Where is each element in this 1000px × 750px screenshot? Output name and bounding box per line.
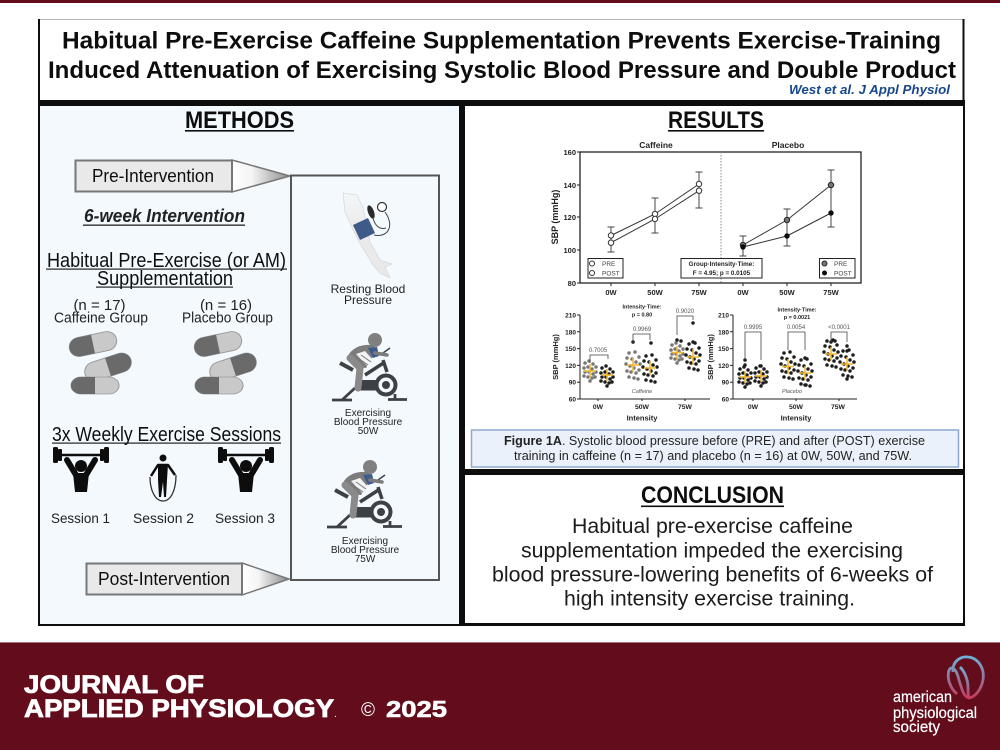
placebo group label: Placebo Group <box>182 310 273 326</box>
copyright <box>334 696 447 722</box>
dot plot: caffeine <box>551 304 710 422</box>
panel: methods <box>40 106 459 624</box>
dot plot: placebo: 210 <box>718 312 729 320</box>
dot plot: caffeine: 0W <box>593 404 604 411</box>
figure caption: training in caffeine (n = 17) and placebo (n = 16) at 0W, 50W, and 75W. <box>514 448 912 463</box>
title text: Habitual Pre-Exercise Caffeine Supplementation Prevents Exercise-Training <box>62 28 941 54</box>
label: exercising blood pressure 75W: 75W <box>355 554 376 565</box>
icon: cyclist 75W <box>327 460 402 527</box>
label: exercising blood pressure 75W: Exercising <box>342 536 388 547</box>
line chart: SBP pre and post: 75W <box>691 288 708 297</box>
dot plot: caffeine: Intensity·Time: <box>622 304 662 310</box>
dot plot: caffeine: p = 0.80 <box>632 312 652 318</box>
journal name: APPLIED PHYSIOLOGY <box>24 695 334 723</box>
supplementation heading: Habitual Pre-Exercise (or AM) <box>47 250 286 272</box>
icon: weightlifter session 3 <box>218 447 274 492</box>
dot plot: placebo <box>706 308 857 422</box>
dot plot: caffeine: 0.9020 <box>676 309 695 315</box>
line chart: SBP pre and post: 75W <box>823 288 840 297</box>
exercise sessions heading: 3x Weekly Exercise Sessions <box>52 424 281 446</box>
icon: jump rope session 2 <box>150 454 176 501</box>
arrow: post-intervention: Post-Intervention <box>98 569 230 589</box>
dot plot: placebo: 0.9995 <box>744 325 763 331</box>
conclusion text: Habitual pre-exercise caffeine <box>572 515 853 538</box>
label: exercising blood pressure 50W: 50W <box>358 426 379 437</box>
legend: caffeine: PRE <box>602 261 616 268</box>
label: exercising blood pressure 50W: Exercising <box>345 408 391 419</box>
dot plot: caffeine: 210 <box>565 312 576 320</box>
conclusion heading: CONCLUSION <box>641 482 784 509</box>
dot plot: placebo: Placebo <box>782 389 802 395</box>
6-week intervention heading: 6-week Intervention <box>84 206 245 226</box>
icon: cyclist 50W <box>332 333 407 400</box>
dot plot: caffeine: Caffeine <box>632 389 652 395</box>
copyright: © <box>361 700 375 721</box>
dot plot: caffeine: 180 <box>565 329 576 336</box>
label: resting blood pressure: Pressure <box>344 293 392 307</box>
logo: american physiological society <box>893 657 983 736</box>
line chart: SBP pre and post: 0W <box>605 288 618 297</box>
line chart: SBP pre and post: 140 <box>563 181 576 190</box>
dot plot: caffeine: 0.9969 <box>633 327 652 333</box>
dot plot: placebo: 75W <box>831 404 846 411</box>
citation: West et al. J Appl Physiol <box>789 83 951 97</box>
dot plot: placebo: Intensity·Time: <box>777 308 817 314</box>
logo: american physiological society: society <box>893 719 940 736</box>
session labels: Session 3 <box>215 510 275 526</box>
dot plot: placebo: <0.0001 <box>828 325 851 331</box>
legend: placebo: PRE <box>834 261 848 268</box>
journal name <box>24 671 334 723</box>
line chart: SBP pre and post: 100 <box>563 246 576 255</box>
dot plot: caffeine: Intensity <box>627 414 658 422</box>
label: exercising blood pressure 50W: Blood Pressure <box>334 417 403 428</box>
label: exercising blood pressure 75W <box>331 536 400 565</box>
line chart: SBP pre and post: Caffeine <box>639 140 673 150</box>
dot plot: placebo: p = 0.0021 <box>784 315 810 321</box>
conclusion text: high intensity exercise training. <box>564 588 855 610</box>
line chart: SBP pre and post <box>550 140 861 297</box>
legend: caffeine: POST <box>602 270 620 278</box>
dot plot: placebo: 0.0054 <box>787 325 806 331</box>
dot plot: placebo: Intensity <box>781 414 812 422</box>
dot plot: placebo: 90 <box>722 380 729 387</box>
icon: caffeine capsules <box>68 330 134 394</box>
supplementation heading <box>46 250 287 290</box>
legend: statistics: Group·Intensity·Time: <box>689 261 754 268</box>
dot plot: placebo: 60 <box>722 396 729 404</box>
arrow: pre-intervention: Pre-Intervention <box>92 166 214 186</box>
caffeine group label: Caffeine Group <box>54 310 148 326</box>
dot plot: placebo: SBP (mmHg) <box>706 334 715 380</box>
dot plot: caffeine: 60 <box>569 396 576 404</box>
dot plot: caffeine: 120 <box>565 363 576 370</box>
label: resting blood pressure <box>331 282 405 307</box>
measurements box <box>291 176 439 580</box>
arrow: post-intervention <box>86 563 289 595</box>
top accent bar <box>0 0 1000 3</box>
title text: Induced Attenuation of Exercising Systolic Blood Pressure and Double Product <box>48 57 956 84</box>
conclusion text: blood pressure-lowering benefits of 6-weeks of <box>492 564 933 586</box>
dot plot: caffeine: SBP (mmHg) <box>551 334 560 380</box>
panel: title <box>38 19 964 106</box>
dot plot: caffeine: 90 <box>569 380 576 387</box>
copyright: 2025 <box>386 696 447 722</box>
dot plot: caffeine: 150 <box>565 346 576 353</box>
line chart: SBP pre and post: 120 <box>563 213 576 222</box>
session labels: Session 2 <box>133 510 194 526</box>
logo: american physiological society: american <box>893 689 952 706</box>
dot plot: placebo: 150 <box>718 346 729 353</box>
icon: blood pressure cuff on arm <box>343 193 392 278</box>
label: exercising blood pressure 50W <box>334 408 403 437</box>
panel: results <box>465 106 963 469</box>
figure caption: Figure 1A. Systolic blood pressure before (PRE) and after (POST) exercise <box>504 433 925 448</box>
legend: caffeine <box>588 258 623 278</box>
placebo group label <box>182 297 273 326</box>
footer band <box>0 642 1000 750</box>
icon: placebo capsules <box>193 330 259 394</box>
conclusion text <box>492 515 933 610</box>
line chart: SBP pre and post: 0W <box>737 288 750 297</box>
dot plot: placebo: 50W <box>789 404 804 411</box>
arrow: pre-intervention <box>76 160 290 192</box>
figure caption <box>472 430 958 467</box>
legend: placebo: POST <box>834 270 852 278</box>
dot plot: caffeine: 0.7005 <box>589 348 608 354</box>
conclusion text: supplementation impeded the exercising <box>521 540 903 562</box>
line chart: SBP pre and post: 160 <box>563 148 576 157</box>
legend: statistics <box>681 258 762 278</box>
dot plot: placebo: 120 <box>718 363 729 370</box>
label: exercising blood pressure 75W: Blood Pressure <box>331 545 400 556</box>
legend: statistics: F = 4.95; p = 0.0105 <box>693 270 751 277</box>
dot plot: placebo: 0W <box>748 404 759 411</box>
panel frame <box>38 100 965 626</box>
dot plot: caffeine: 50W <box>635 404 650 411</box>
supplementation heading: Supplementation <box>97 268 233 290</box>
label: resting blood pressure: Resting Blood <box>331 282 405 296</box>
icon: weightlifter session 1 <box>53 447 109 492</box>
placebo group label: (n = 16) <box>200 297 252 314</box>
dot plot: caffeine: 75W <box>678 404 693 411</box>
logo: american physiological society: physiological <box>893 705 977 722</box>
results heading: RESULTS <box>668 107 764 134</box>
methods heading: METHODS <box>185 107 294 134</box>
legend: placebo <box>820 258 855 278</box>
line chart: SBP pre and post: 50W <box>647 288 664 297</box>
caffeine group label: (n = 17) <box>73 297 126 314</box>
journal name: JOURNAL OF <box>24 671 204 699</box>
line chart: SBP pre and post: 50W <box>779 288 796 297</box>
session labels: Session 1 <box>51 510 110 526</box>
line chart: SBP pre and post: Placebo <box>772 140 804 150</box>
panel: conclusion <box>465 475 963 623</box>
line chart: SBP pre and post: 80 <box>568 279 576 288</box>
caffeine group label <box>54 297 148 326</box>
title text <box>48 28 956 84</box>
session labels <box>51 510 275 526</box>
line chart: SBP pre and post: SBP (mmHg) <box>550 190 560 244</box>
copyright: . <box>334 709 337 720</box>
dot plot: placebo: 180 <box>718 329 729 336</box>
